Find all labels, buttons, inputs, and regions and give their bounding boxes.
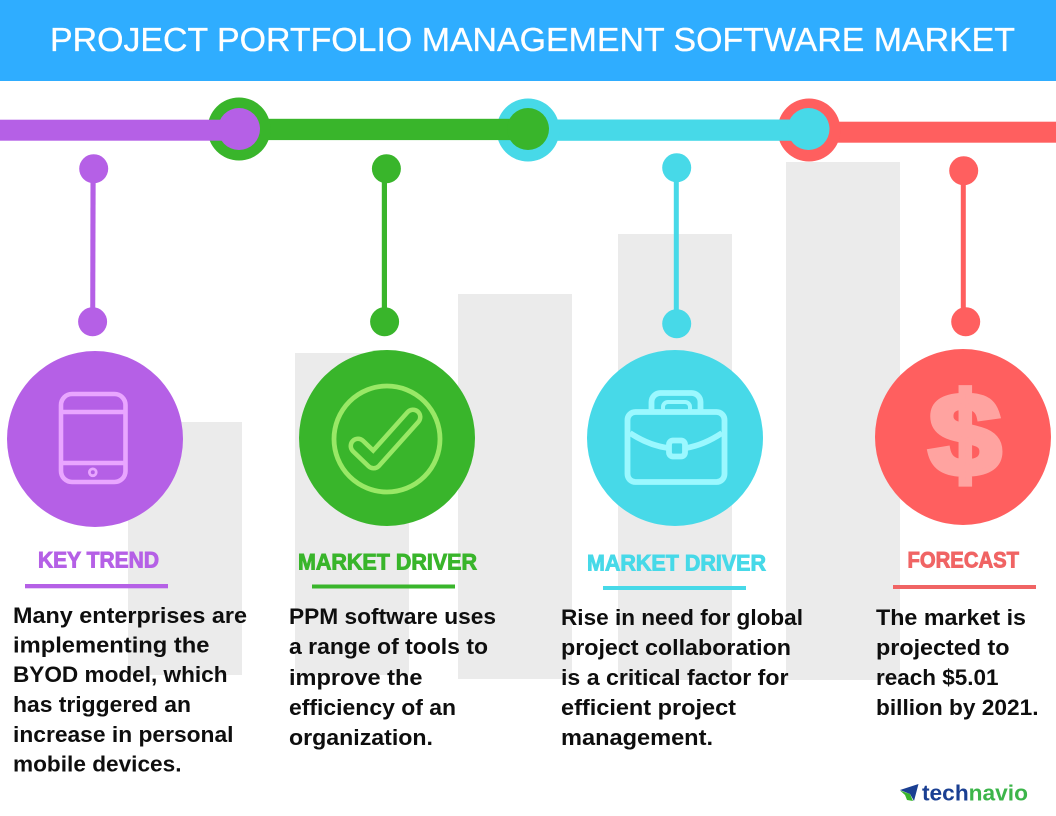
- text block: market driver one: [289, 604, 496, 750]
- heading: forecast: [893, 547, 1036, 589]
- heading: market driver green: MARKET DRIVER: [298, 549, 477, 574]
- heading: market driver cyan: MARKET DRIVER: [587, 551, 766, 576]
- heading: key trend: KEY TREND: [38, 547, 159, 572]
- text block: forecast: projected to: [876, 635, 1010, 660]
- text block: market driver one: organization.: [289, 725, 433, 750]
- text block: market driver one: a range of tools to: [289, 634, 488, 659]
- text block: forecast: The market is: [876, 605, 1026, 630]
- text block: market driver two: management.: [561, 725, 713, 750]
- icon: dollar sign in red circle: [875, 349, 1051, 525]
- timeline: [0, 98, 1056, 162]
- title: PROJECT PORTFOLIO MANAGEMENT SOFTWARE MARKET: [50, 22, 1015, 59]
- text block: market driver two: [561, 605, 803, 750]
- heading: market driver cyan: [587, 551, 766, 590]
- connector: purple: [78, 154, 108, 336]
- text block: forecast: billion by 2021.: [876, 695, 1038, 720]
- connector: cyan: [662, 153, 691, 338]
- text block: key trend: implementing the: [13, 632, 210, 658]
- logo: technavio: technavio: [922, 780, 1028, 806]
- text block: forecast: [876, 605, 1038, 720]
- text block: key trend: [13, 603, 247, 776]
- text block: market driver two: is a critical factor for: [561, 665, 789, 690]
- icon: tablet in purple circle: [7, 351, 183, 527]
- text block: key trend: increase in personal: [13, 722, 233, 747]
- connector: green: [370, 154, 401, 336]
- text block: market driver one: PPM software uses: [289, 604, 496, 629]
- text block: key trend: BYOD model, which: [13, 662, 228, 687]
- text block: market driver two: Rise in need for global: [561, 605, 803, 630]
- icon: dollar sign in red circle: $: [929, 369, 1001, 500]
- text block: key trend: Many enterprises are: [13, 603, 247, 628]
- text block: market driver two: project collaboration: [561, 635, 791, 660]
- text block: market driver two: efficient project: [561, 695, 737, 720]
- background bar chart: [128, 162, 900, 680]
- title banner: [0, 0, 1056, 81]
- heading: forecast: FORECAST: [908, 547, 1020, 572]
- heading: market driver green: [298, 549, 477, 588]
- connector: red: [949, 156, 980, 336]
- text block: market driver one: efficiency of an: [289, 695, 456, 720]
- heading: key trend: [25, 547, 168, 588]
- text block: market driver one: improve the: [289, 665, 422, 690]
- text block: key trend: has triggered an: [13, 692, 191, 717]
- icon: briefcase in cyan circle: [587, 350, 763, 526]
- text block: key trend: mobile devices.: [13, 752, 182, 776]
- icon: check mark in green circle: [299, 350, 475, 526]
- text block: forecast: reach $5.01: [876, 665, 998, 690]
